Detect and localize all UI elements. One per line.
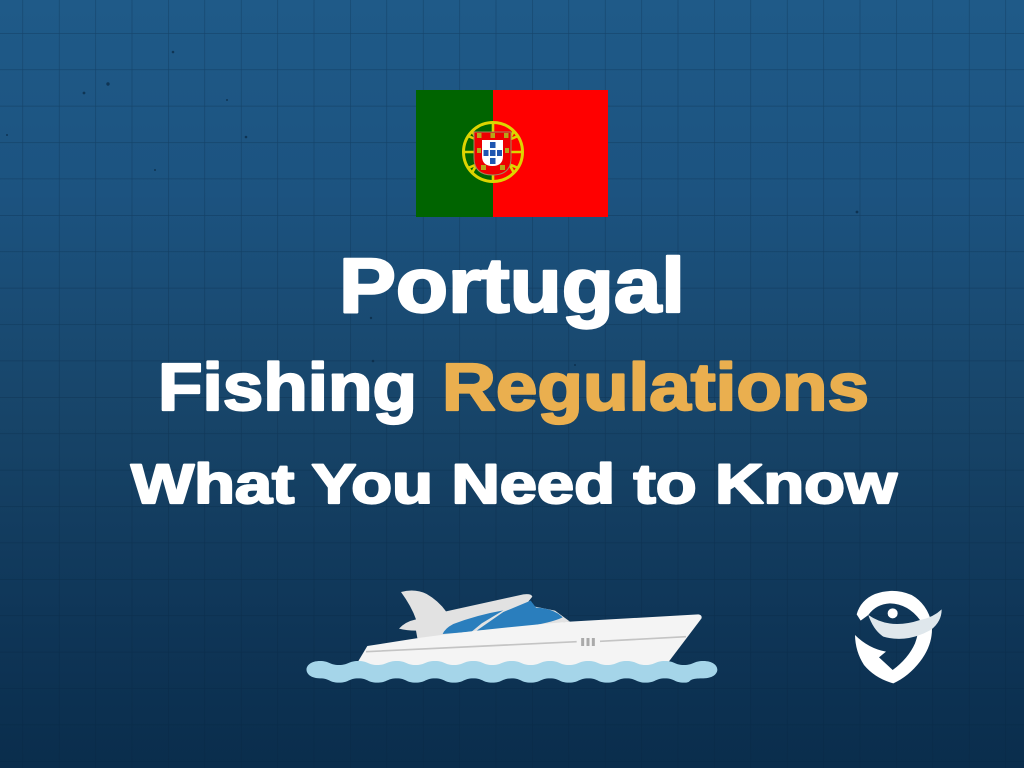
boat fin xyxy=(399,591,570,640)
windows xyxy=(443,610,503,634)
flag of Portugal xyxy=(416,90,608,217)
hull stripe xyxy=(366,637,686,652)
icon: coat of arms xyxy=(464,122,522,182)
heading: Fishing Regulations: Regulations xyxy=(442,350,869,425)
fish band xyxy=(868,609,942,639)
vents xyxy=(583,638,593,646)
water xyxy=(306,661,717,683)
heading: Fishing Regulations: Fishing xyxy=(158,350,417,425)
subtitle: What You Need to Know xyxy=(131,452,898,515)
logo: fish hook xyxy=(855,591,942,683)
heading: Fishing Regulations xyxy=(158,350,869,425)
icon: yacht on waves xyxy=(306,591,717,683)
hull xyxy=(355,614,702,667)
fish body xyxy=(855,591,932,683)
eye xyxy=(888,608,898,618)
title: Portugal: Portugal xyxy=(339,243,685,329)
